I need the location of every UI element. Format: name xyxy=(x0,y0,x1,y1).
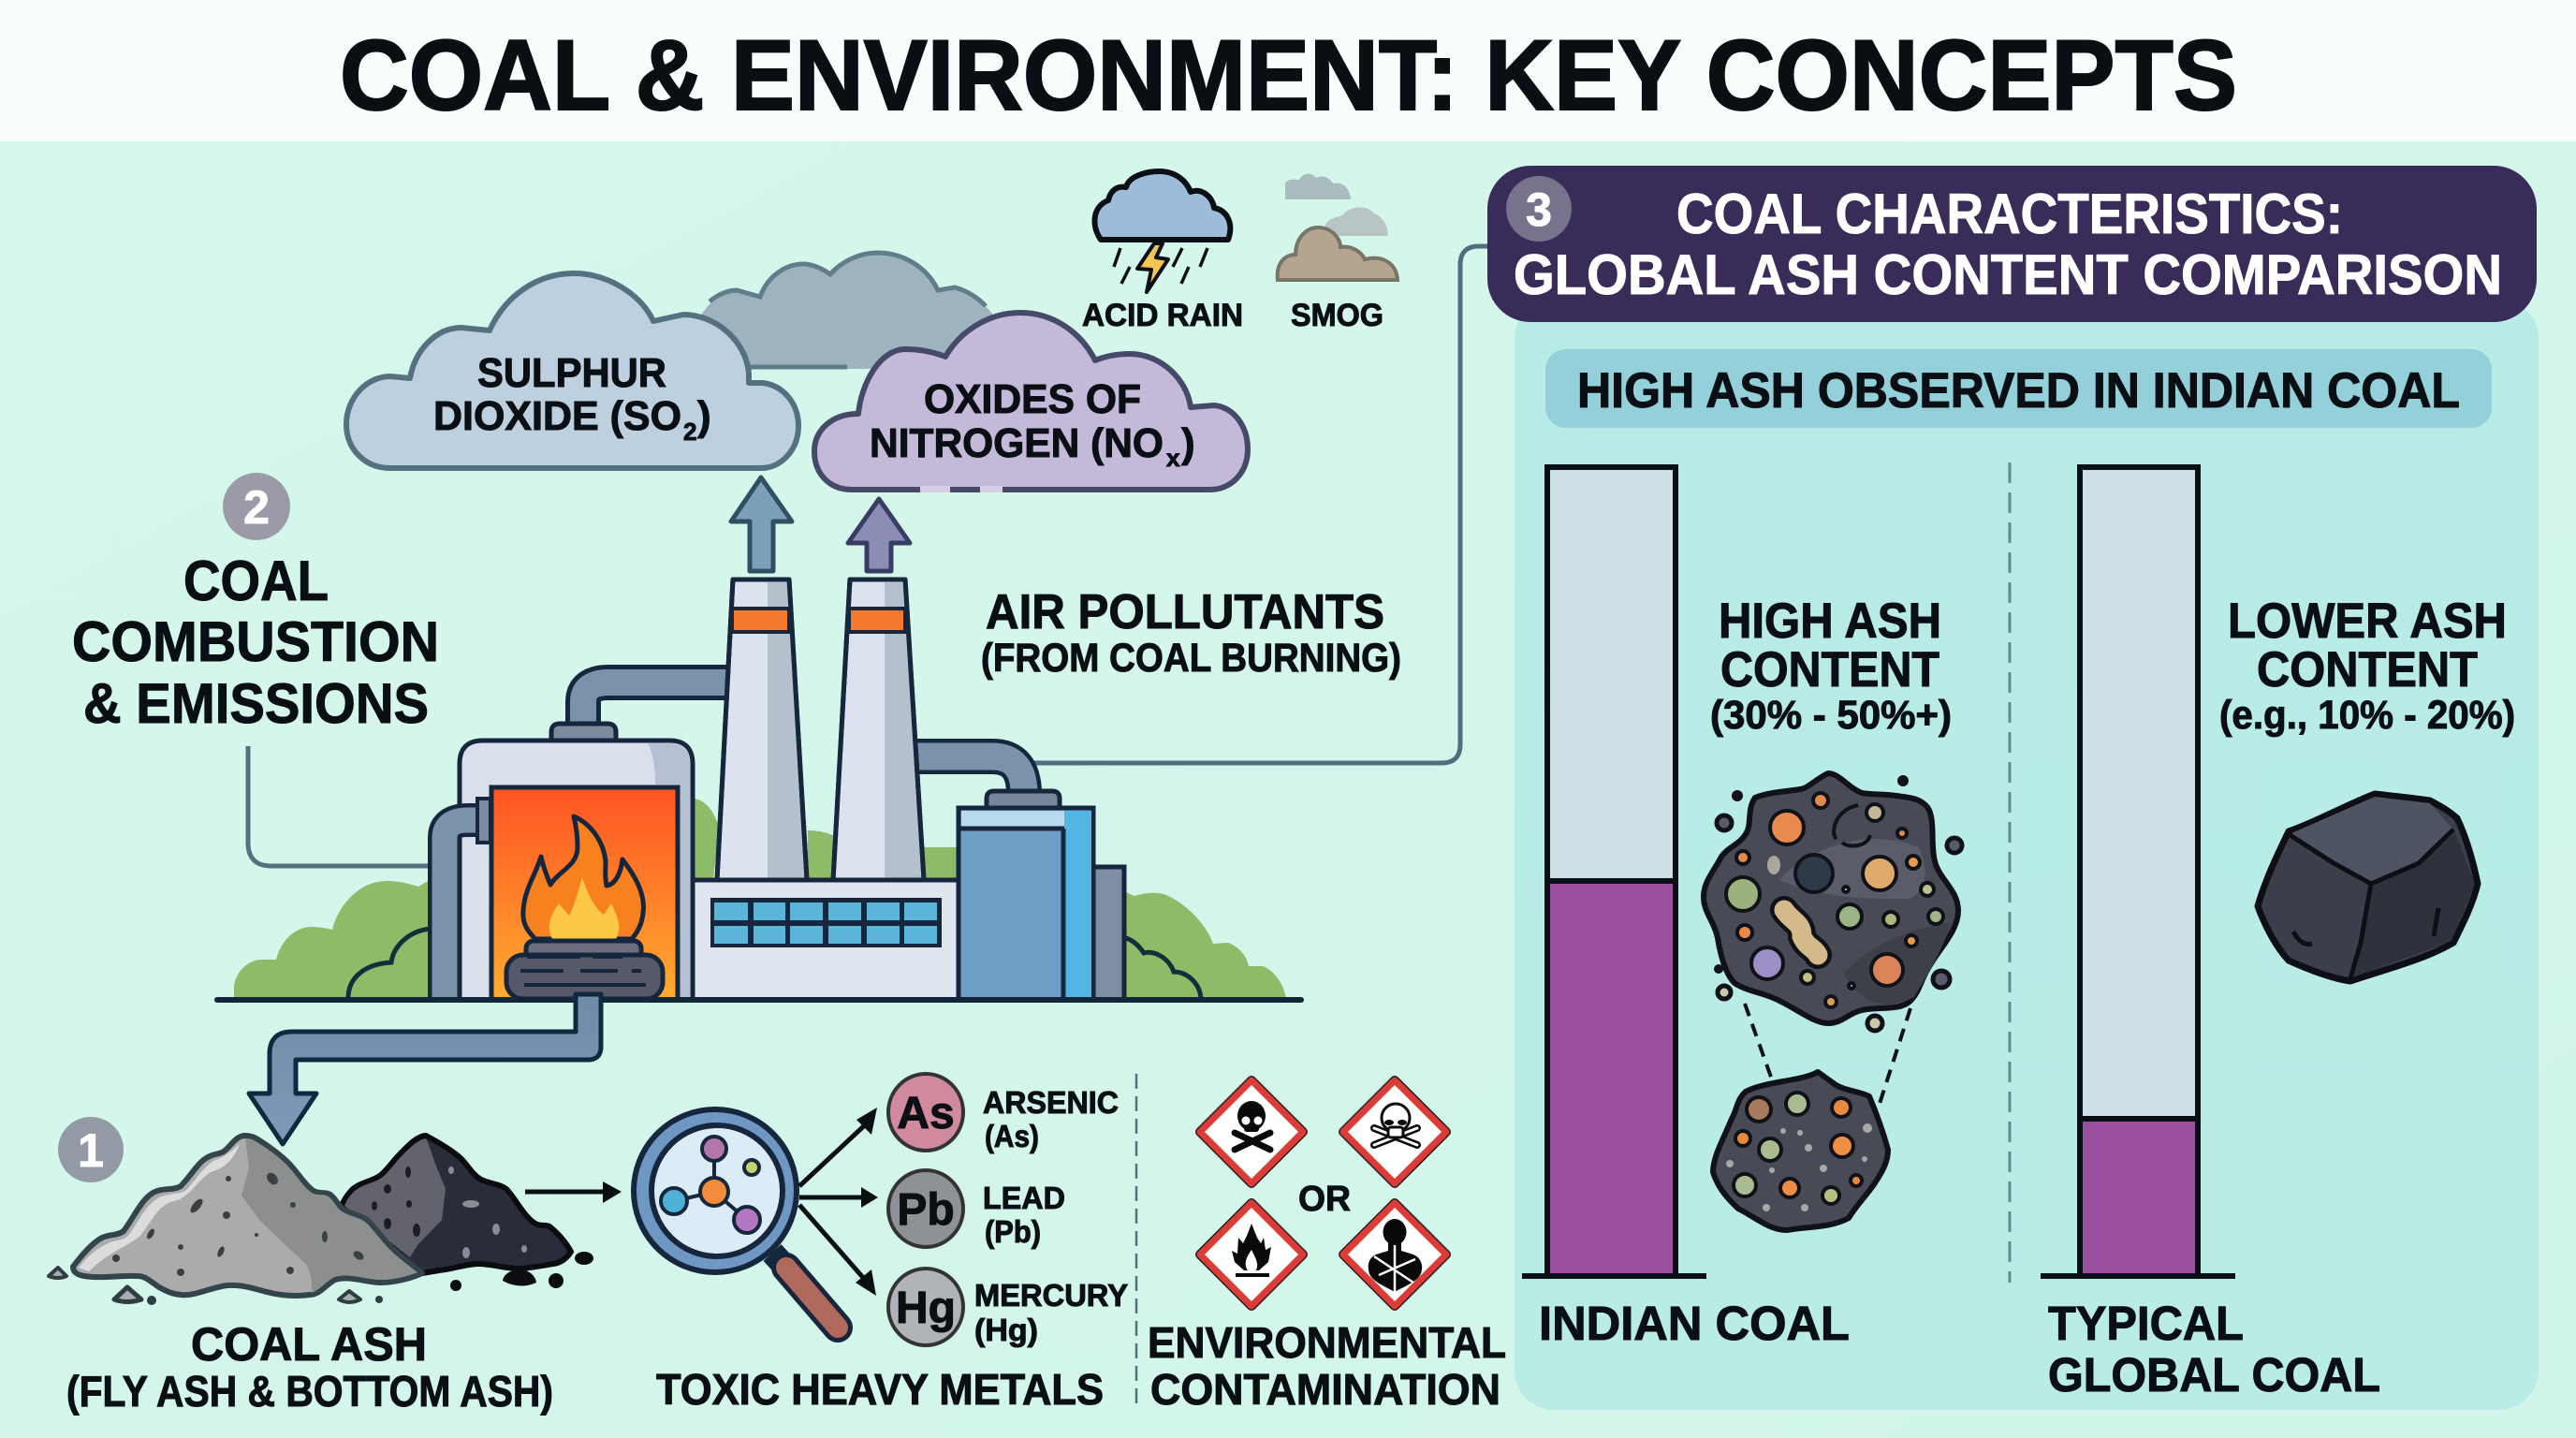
icon: acid rain xyxy=(1082,171,1243,333)
text: or: OR xyxy=(1298,1180,1351,1219)
dashed column divider xyxy=(2009,462,2011,1283)
metal: mercury xyxy=(888,1269,1128,1347)
label: toxic heavy metals: TOXIC HEAVY METALS xyxy=(656,1365,1104,1414)
metal: lead: Pb xyxy=(897,1185,955,1235)
metal: lead: (Pb) xyxy=(985,1214,1041,1249)
label: environmental contamination: ENVIRONMENTAL xyxy=(1148,1318,1506,1367)
cloud: sulphur dioxide: DIOXIDE (SO xyxy=(433,393,681,439)
cloud: oxides of nitrogen: x xyxy=(1166,444,1180,472)
heading: coal combustion and emissions xyxy=(72,550,439,735)
panel header xyxy=(1487,166,2537,322)
metal: arsenic xyxy=(888,1074,1119,1153)
turbine building xyxy=(693,880,959,1000)
grey pile xyxy=(73,1136,422,1296)
icon: ash piles xyxy=(49,1136,593,1305)
black pile xyxy=(342,1136,571,1273)
label: lower ash content: (e.g., 10% - 20%) xyxy=(2219,693,2515,738)
arrow: ash to metals xyxy=(525,1181,622,1203)
icon: high ash coal lump xyxy=(1704,773,1962,1031)
icon: small ash coal lump xyxy=(1713,1072,1888,1230)
arrow: ash down xyxy=(249,994,601,1144)
sub-banner: HIGH ASH OBSERVED IN INDIAN COAL xyxy=(1577,363,2460,418)
furnace window xyxy=(491,787,678,1000)
header text: GLOBAL ASH CONTENT COMPARISON xyxy=(1514,243,2502,306)
pipe: boiler left xyxy=(445,799,490,1000)
dashed divider xyxy=(1135,1074,1137,1406)
cloud: background grey xyxy=(702,253,992,369)
metal: arsenic: ARSENIC xyxy=(983,1085,1119,1120)
icon: smog: SMOG xyxy=(1291,298,1383,333)
hazard: black skull xyxy=(1200,1080,1303,1183)
label: air pollutants: (FROM COAL BURNING) xyxy=(981,636,1401,681)
zoom lines between lumps xyxy=(1745,1004,1910,1109)
pipe: boiler to chimney xyxy=(583,682,735,726)
label: high ash content: (30% - 50%+) xyxy=(1710,693,1952,738)
badge 2 xyxy=(223,473,290,540)
cloud: sulphur dioxide: SULPHUR xyxy=(477,350,666,396)
coal bed xyxy=(506,941,663,999)
hazard: flame xyxy=(1200,1203,1303,1306)
metal: mercury: Hg xyxy=(896,1284,956,1333)
connector: label to boiler xyxy=(248,746,430,866)
cloud: oxides of nitrogen: ) xyxy=(1181,420,1195,466)
label: high ash content: HIGH ASH xyxy=(1719,594,1941,649)
label: high ash content xyxy=(1710,594,1952,738)
label: coal ash xyxy=(66,1318,553,1416)
metal: lead xyxy=(888,1170,1065,1249)
blue tower xyxy=(959,791,1093,1000)
boiler housing xyxy=(460,724,693,1000)
icon: smog xyxy=(1278,174,1398,333)
badge 2: 2 xyxy=(243,481,270,534)
molecule xyxy=(661,1137,760,1233)
label: high ash content: CONTENT xyxy=(1720,642,1939,697)
arrow: SO2 up xyxy=(731,477,792,571)
grey rear tower xyxy=(1076,867,1124,1000)
heading: coal combustion and emissions: COMBUSTION xyxy=(72,610,439,673)
title: COAL & ENVIRONMENT: KEY CONCEPTS xyxy=(340,19,2237,131)
bar chart: typical global coal xyxy=(2041,467,2235,1276)
bar label: Indian coal: INDIAN COAL xyxy=(1539,1297,1850,1350)
cloud: oxides of nitrogen: OXIDES OF xyxy=(924,376,1141,422)
header text xyxy=(1514,183,2502,306)
bar label: typical global coal xyxy=(2048,1297,2380,1401)
label: lower ash content: LOWER ASH xyxy=(2228,594,2507,649)
label: air pollutants xyxy=(981,585,1401,681)
connector: plant to panel 3 xyxy=(1030,246,1498,763)
icon: magnifying glass xyxy=(634,1109,838,1328)
title band xyxy=(0,0,2576,141)
label: coal ash: (FLY ASH & BOTTOM ASH) xyxy=(66,1367,553,1416)
cloud: sulphur dioxide xyxy=(346,273,798,468)
label: lower ash content: CONTENT xyxy=(2257,642,2478,697)
arrows: magnifier to metals xyxy=(799,1108,878,1296)
label: coal ash: COAL ASH xyxy=(191,1318,427,1371)
cloud: sulphur dioxide: ) xyxy=(697,393,711,439)
badge 3: 3 xyxy=(1526,183,1552,236)
bar label: typical global coal: TYPICAL xyxy=(2048,1297,2244,1350)
label: air pollutants: AIR POLLUTANTS xyxy=(986,585,1384,639)
metal: arsenic: (As) xyxy=(985,1119,1039,1153)
badge 1: 1 xyxy=(78,1124,104,1177)
heading: coal combustion and emissions: & EMISSIONS xyxy=(83,672,429,735)
badge 1 xyxy=(58,1117,124,1182)
hazard: outline skull xyxy=(1343,1080,1446,1183)
heading: coal combustion and emissions: COAL xyxy=(183,550,329,612)
pipe: right flue xyxy=(913,756,1024,794)
building windows xyxy=(710,898,942,947)
cloud: oxides of nitrogen xyxy=(814,313,1248,492)
metal: mercury: (Hg) xyxy=(974,1313,1038,1347)
chimney 2 xyxy=(833,580,924,880)
header text: COAL CHARACTERISTICS: xyxy=(1676,183,2343,245)
metal: lead: LEAD xyxy=(983,1181,1065,1215)
bushes xyxy=(234,799,1286,999)
icon: low ash coal lump xyxy=(2258,794,2478,981)
power plant xyxy=(217,580,1301,1000)
label: lower ash content xyxy=(2219,594,2515,738)
chimney 1 xyxy=(717,580,807,880)
panel: coal characteristics xyxy=(1487,166,2539,1410)
label: environmental contamination: CONTAMINATION xyxy=(1150,1365,1500,1414)
sub-banner xyxy=(1545,349,2492,428)
hazard: health xyxy=(1343,1203,1446,1306)
pebbles xyxy=(49,1252,593,1305)
metal: arsenic: As xyxy=(897,1089,955,1138)
badge 3 xyxy=(1506,176,1572,242)
bar chart: Indian coal xyxy=(1522,467,1706,1276)
cloud: oxides of nitrogen: NITROGEN (NO xyxy=(870,420,1164,466)
icon: acid rain: ACID RAIN xyxy=(1082,298,1243,333)
arrow: NOx up xyxy=(848,499,910,571)
metal: mercury: MERCURY xyxy=(974,1278,1128,1313)
bar label: typical global coal: GLOBAL COAL xyxy=(2048,1348,2380,1401)
label: environmental contamination xyxy=(1148,1318,1506,1414)
cloud: sulphur dioxide: 2 xyxy=(683,418,696,446)
ground line xyxy=(217,997,1301,1003)
icon: flame xyxy=(523,816,643,939)
